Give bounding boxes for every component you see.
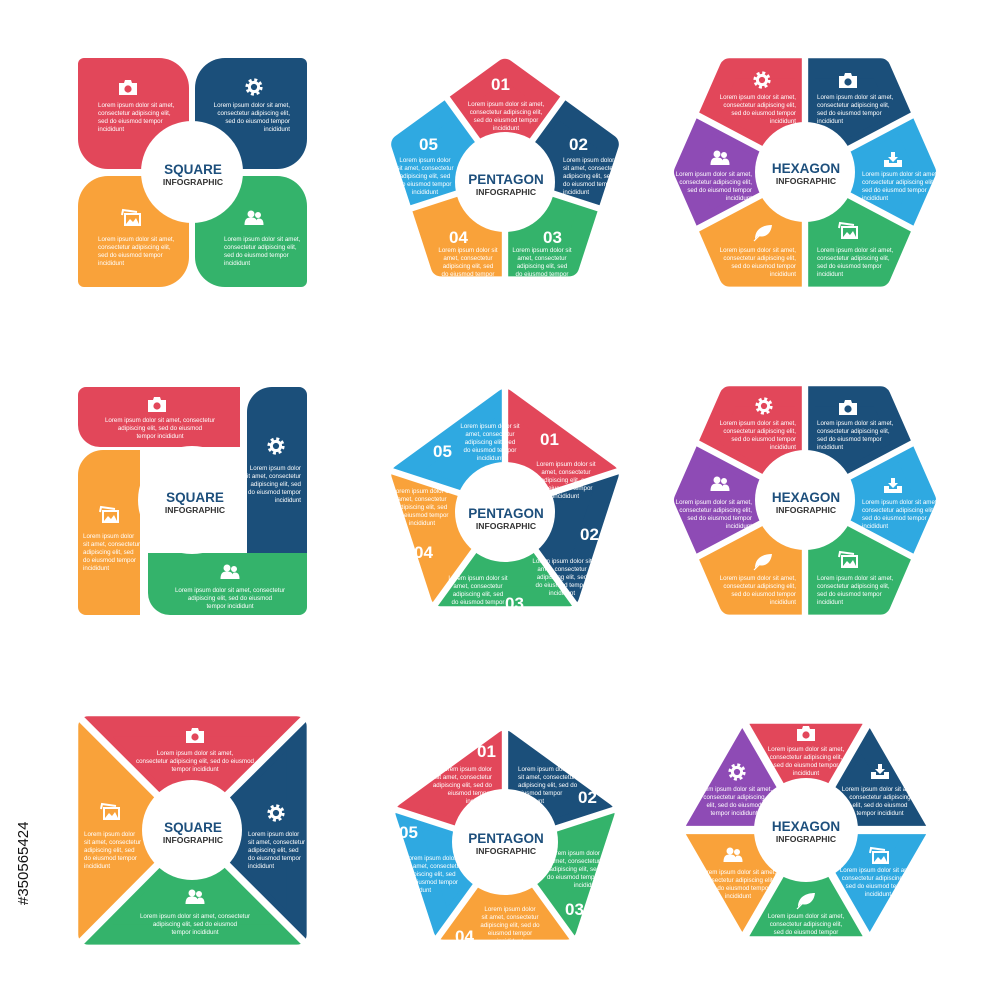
icons and text: sed do eiusmod tempor — [774, 762, 838, 769]
petal: blue gear: sed do eiusmod tempor — [225, 118, 290, 125]
labels: incididunt — [553, 493, 579, 500]
labels: Lorem ipsum dolor — [441, 766, 492, 773]
labels: incididunt — [465, 607, 491, 614]
icons and text: Lorem ipsum dolor sit amet, — [768, 746, 844, 753]
labels: adipiscing elit, sed — [549, 866, 601, 873]
labels: eiusmod tempor — [448, 790, 492, 797]
icons and text: Lorem ipsum dolor sit amet, — [700, 869, 776, 876]
icons and text: Lorem ipsum dolor sit amet, — [676, 499, 752, 506]
panel: pentagon infographic A — [396, 69, 620, 289]
labels: incididunt — [409, 520, 435, 527]
icons and text: incididunt — [862, 195, 888, 202]
watermark id: #350565424 — [15, 822, 32, 905]
icons and text: Lorem ipsum dolor — [84, 831, 135, 838]
petal: blue gear: Lorem ipsum dolor sit amet, — [214, 102, 290, 109]
icons and text: sit amet, consectetur — [248, 839, 305, 846]
panel: hexagon infographic A — [676, 52, 939, 293]
icons and text: sed do eiusmod tempor — [687, 515, 752, 522]
labels: adipiscing elit, sed — [537, 574, 588, 581]
labels: numbers and text: adipiscing elit, sed — [517, 263, 568, 270]
icons and text: incididunt — [770, 599, 796, 606]
icons and text — [676, 399, 939, 606]
petal: green people: sed do eiusmod tempor — [224, 252, 289, 259]
icons and text: consectetur adipiscing elit, — [679, 507, 752, 514]
labels: numbers and text: Lorem ipsum dolor sit — [438, 247, 498, 254]
petal: blue gear: consectetur adipiscing elit, — [217, 110, 290, 117]
icons and text: Lorem ipsum dolor sit amet, — [720, 420, 796, 427]
icons and text: incididunt — [726, 523, 752, 530]
petal: red camera: Lorem ipsum dolor sit amet, — [98, 102, 175, 109]
icons and text: incididunt — [84, 863, 110, 870]
icons and text: sed do eiusmod tempor — [731, 110, 796, 117]
labels: numbers and text: do eiusmod tempor — [563, 181, 616, 188]
icons and text: tempor incididunt — [171, 766, 219, 773]
icons and text: incididunt — [817, 271, 843, 278]
icons and text: sed do eiusmod tempor — [706, 885, 770, 892]
icons and text: consectetur adipiscing elit, — [770, 921, 843, 928]
labels: 04 — [455, 927, 474, 946]
labels: numbers and text: incididunt — [412, 189, 438, 196]
petal: green people: consectetur adipiscing elit, — [224, 244, 297, 251]
icons and text: Lorem ipsum dolor sit amet, — [842, 786, 918, 793]
icons and text: sed do eiusmod tempor — [817, 436, 882, 443]
labels: amet, consectetur — [541, 469, 591, 476]
panel: pentagon infographic C — [395, 730, 615, 940]
center label — [455, 132, 555, 232]
petal: red camera: incididunt — [98, 126, 124, 133]
labels: numbers and text: Lorem ipsum dolor — [563, 157, 614, 164]
labels: numbers and text: adipiscing elit, sed — [400, 173, 451, 180]
petal: green people: tempor incididunt — [206, 603, 254, 610]
icons and text: Lorem ipsum dolor sit amet, — [817, 247, 894, 254]
labels — [399, 742, 601, 946]
icons and text — [676, 73, 939, 278]
labels: numbers and text: sit amet, consectetur — [396, 165, 454, 172]
labels: sit amet, consectetur — [543, 858, 600, 865]
petal: red camera: adipiscing elit, sed do eiusmod — [118, 425, 203, 432]
labels: sit amet, consectetur — [435, 774, 492, 781]
petal: orange image: sit amet, consectetur — [83, 541, 140, 548]
icons and text: incididunt — [726, 195, 752, 202]
center label: SQUARE — [164, 162, 222, 177]
petal: green people: adipiscing elit, sed do eiusmod — [188, 595, 273, 602]
center label — [755, 450, 855, 550]
petal: orange image: incididunt — [83, 565, 109, 572]
icons and text: Lorem ipsum dolor sit amet, — [720, 575, 796, 582]
labels: Lorem ipsum dolor — [405, 855, 456, 862]
labels: Lorem ipsum dolor — [484, 906, 536, 913]
labels: numbers and text: amet, consectetur — [517, 255, 567, 262]
icons and text — [84, 728, 305, 936]
petal: blue gear: adipiscing elit, sed — [250, 481, 302, 488]
center label: INFOGRAPHIC — [776, 505, 836, 515]
petal: red camera: consectetur adipiscing elit, — [98, 110, 171, 117]
icons and text: incididunt — [770, 118, 796, 125]
icons and text: sed do eiusmod tempor — [731, 436, 796, 443]
icons and text — [696, 726, 918, 944]
icons and text: incididunt — [725, 893, 751, 900]
petal: red camera: Lorem ipsum dolor sit amet, consectetur — [105, 417, 215, 424]
icons and text: incididunt — [817, 118, 843, 125]
icons and text: sed do eiusmod tempor — [846, 883, 910, 890]
labels: Lorem ipsum dolor sit — [392, 488, 452, 495]
icons and text: Lorem ipsum dolor sit amet, — [720, 247, 796, 254]
panel: square infographic C (octagon) — [78, 716, 307, 945]
labels: incididunt — [574, 882, 600, 889]
center label: HEXAGON — [772, 819, 840, 834]
center label — [138, 446, 246, 554]
icons and text: sed do eiusmod tempor — [774, 929, 838, 936]
icons and text: sed do eiusmod tempor — [817, 591, 882, 598]
labels: do eiusmod tempor — [405, 879, 458, 886]
icons and text: adipiscing elit, sed — [248, 847, 299, 854]
petal: blue gear: sit amet, consectetur — [244, 473, 301, 480]
labels: incididunt — [477, 455, 503, 462]
labels: 01 — [477, 742, 496, 761]
petal: orange image: consectetur adipiscing elit, — [98, 244, 171, 251]
labels: 05 — [433, 442, 452, 461]
labels: numbers and text: incididunt — [493, 125, 519, 132]
icons and text: consectetur adipiscing elit, sed do eiusmod — [136, 758, 255, 765]
panel: pentagon infographic B — [391, 389, 619, 606]
center label: INFOGRAPHIC — [476, 521, 536, 531]
center label — [754, 778, 858, 882]
labels: incididunt — [518, 798, 544, 805]
icons and text: consectetur adipiscing elit, — [702, 877, 775, 884]
labels: incididunt — [497, 938, 523, 945]
icons and text: sed do eiusmod tempor — [731, 263, 796, 270]
labels: 03 — [505, 594, 524, 613]
labels: adipiscing elit, sed — [453, 591, 504, 598]
icons and text: Lorem ipsum dolor sit amet, — [817, 94, 894, 101]
icons and text: sit amet, consectetur — [84, 839, 141, 846]
labels: numbers and text: amet, consectetur — [443, 255, 493, 262]
labels: Lorem ipsum dolor — [518, 766, 569, 773]
labels: amet, consectetur — [537, 566, 587, 573]
labels: Lorem ipsum dolor sit — [532, 558, 592, 565]
petal: blue gear: incididunt — [264, 126, 290, 133]
panel: hexagon infographic B — [676, 380, 939, 621]
labels: numbers and text: sit amet, consectetur — [563, 165, 620, 172]
labels: 02 — [578, 788, 597, 807]
labels: do eiusmod tempor — [464, 447, 516, 454]
labels: 03 — [565, 900, 584, 919]
icons and text: sed do eiusmod tempor — [731, 591, 796, 598]
petal: red camera: tempor incididunt — [136, 433, 184, 440]
labels: amet, consectetur — [453, 583, 503, 590]
petal: orange image: incididunt — [98, 260, 124, 267]
labels: numbers and text: sed do eiusmod tempor — [474, 117, 538, 124]
labels: numbers and text: 01 — [491, 75, 510, 94]
center label: INFOGRAPHIC — [776, 176, 836, 186]
labels: adipiscing elit, sed do — [518, 782, 578, 789]
center label — [142, 780, 242, 880]
icons and text: incididunt — [248, 863, 274, 870]
labels: sit amet, consectetur — [481, 914, 539, 921]
labels: numbers and text: incididunt — [455, 279, 481, 286]
icons and text: incididunt — [793, 770, 819, 777]
petal: orange image: Lorem ipsum dolor — [83, 533, 134, 540]
labels: numbers and text: incididunt — [529, 279, 555, 286]
center label: PENTAGON — [468, 831, 544, 846]
icons and text: incididunt — [817, 599, 843, 606]
labels — [392, 423, 599, 614]
labels: numbers and text: Lorem ipsum dolor — [399, 157, 451, 164]
icons and text: Lorem ipsum dolor sit amet, consectetur — [140, 913, 250, 920]
icons and text: consectetur adipiscing elit, — [817, 102, 890, 109]
center label — [452, 789, 558, 895]
icons and text: consectetur adipiscing elit, — [723, 583, 796, 590]
labels: adipiscing elit, sed — [405, 871, 456, 878]
icons and text: incididunt — [865, 891, 891, 898]
icons and text: Lorem ipsum dolor sit amet, — [696, 786, 772, 793]
icons and text: Lorem ipsum dolor sit amet, — [720, 94, 796, 101]
labels: eiusmod tempor — [518, 790, 562, 797]
icons and text: consectetur adipiscing elit, — [862, 507, 935, 514]
labels: 01 — [540, 430, 559, 449]
petal: red camera: sed do eiusmod tempor — [98, 118, 163, 125]
labels: adipiscing elit, sed — [397, 504, 448, 511]
center label: INFOGRAPHIC — [776, 834, 836, 844]
petal: orange image: do eiusmod tempor — [83, 557, 136, 564]
icons and text: adipiscing elit, sed — [84, 847, 135, 854]
center label: PENTAGON — [468, 172, 544, 187]
labels: 02 — [580, 525, 599, 544]
labels: Lorem ipsum dolor — [549, 850, 600, 857]
center label: INFOGRAPHIC — [476, 846, 536, 856]
petal: orange image: sed do eiusmod tempor — [98, 252, 163, 259]
petal: blue gear: incididunt — [275, 497, 301, 504]
icons and text: consectetur adipiscing elit, — [723, 255, 796, 262]
labels: numbers and text: Lorem ipsum dolor sit — [512, 247, 572, 254]
labels: 04 — [414, 543, 433, 562]
labels: 05 — [399, 823, 418, 842]
labels: numbers and text: 02 — [569, 135, 588, 154]
icons and text: Lorem ipsum dolor — [248, 831, 299, 838]
labels: incididunt — [466, 798, 492, 805]
center label: INFOGRAPHIC — [476, 187, 536, 197]
icons and text: incididunt — [770, 271, 796, 278]
labels: amet, consectetur — [465, 431, 515, 438]
icons and text: elit, sed do eiusmod — [706, 802, 762, 809]
center label — [141, 121, 243, 223]
labels: adipiscing elit, sed — [541, 477, 592, 484]
labels: numbers and text: adipiscing elit, sed — [443, 263, 494, 270]
icons and text: consectetur adipiscing elit, — [723, 428, 796, 435]
labels: numbers and text: 04 — [449, 228, 468, 247]
icons and text: consectetur adipiscing elit, — [770, 754, 843, 761]
petal: red camera — [78, 387, 240, 447]
petal: red camera — [78, 58, 189, 169]
petal: blue gear — [195, 58, 307, 169]
labels: adipiscing elit, sed do — [433, 782, 493, 789]
icons and text: Lorem ipsum dolor sit amet, — [817, 420, 894, 427]
petal: orange image: adipiscing elit, sed — [83, 549, 134, 556]
labels: amet, consectetur — [397, 496, 447, 503]
icons and text: do eiusmod tempor — [248, 855, 301, 862]
labels: numbers and text: consectetur adipiscing elit, — [470, 109, 543, 116]
labels: numbers and text: adipiscing elit, sed — [563, 173, 614, 180]
panel: hexagon infographic C — [686, 724, 926, 936]
center label: HEXAGON — [772, 161, 840, 176]
icons and text: consectetur adipiscing elit, — [723, 102, 796, 109]
panel: square infographic B (pinwheel) — [78, 387, 307, 615]
center label: PENTAGON — [468, 506, 544, 521]
labels: Lorem ipsum dolor sit — [460, 423, 520, 430]
icons and text: incididunt — [793, 937, 819, 944]
icons and text: adipiscing elit, sed do eiusmod — [153, 921, 238, 928]
icons and text: Lorem ipsum dolor sit amet, — [768, 913, 844, 920]
icons and text: sed do eiusmod tempor — [817, 263, 882, 270]
icons and text: consectetur adipiscing elit, — [679, 179, 752, 186]
icons and text: consectetur adipiscing elit, — [842, 875, 915, 882]
center label — [755, 122, 855, 222]
labels: eiusmod tempor — [488, 930, 532, 937]
icons and text: elit, sed do eiusmod — [852, 802, 908, 809]
icons and text: incididunt — [817, 444, 843, 451]
labels: do eiusmod tempor — [540, 485, 592, 492]
icons and text: Lorem ipsum dolor sit amet, — [862, 499, 939, 506]
icons and text: incididunt — [770, 444, 796, 451]
center label: SQUARE — [164, 820, 222, 835]
icons and text: tempor incididunt — [171, 929, 219, 936]
icons and text: consectetur adipiscing — [849, 794, 911, 801]
icons and text: sed do eiusmod tempor — [862, 515, 927, 522]
icons and text: consectetur adipiscing elit, — [817, 255, 890, 262]
labels: numbers and text: do eiusmod tempor — [399, 181, 451, 188]
labels: Lorem ipsum dolor sit — [448, 575, 508, 582]
labels: sit amet, consectetur — [405, 863, 462, 870]
petal: green people: incididunt — [224, 260, 250, 267]
labels: adipiscing elit, sed do — [480, 922, 540, 929]
labels: numbers and text: incididunt — [563, 189, 589, 196]
icons and text: consectetur adipiscing elit, — [817, 583, 890, 590]
center label — [455, 462, 555, 562]
petal: orange image: Lorem ipsum dolor sit amet, — [98, 236, 175, 243]
labels: incididunt — [405, 887, 431, 894]
center label: HEXAGON — [772, 490, 840, 505]
labels: do eiusmod tempor — [452, 599, 504, 606]
labels: numbers and text: Lorem ipsum dolor sit amet, — [468, 101, 544, 108]
icons and text: Lorem ipsum dolor sit amet, — [862, 171, 939, 178]
labels: numbers and text: 03 — [543, 228, 562, 247]
labels: incididunt — [549, 590, 575, 597]
icons and text: sed do eiusmod tempor — [862, 187, 927, 194]
icons and text: Lorem ipsum dolor sit amet, — [676, 171, 752, 178]
icons and text: do eiusmod tempor — [84, 855, 137, 862]
labels: do eiusmod tempor — [536, 582, 588, 589]
petal: orange image — [78, 176, 189, 287]
icons and text: Lorem ipsum dolor sit amet, — [157, 750, 233, 757]
petal: blue gear: Lorem ipsum dolor — [250, 465, 301, 472]
labels: sit amet, consectetur — [518, 774, 575, 781]
icons and text: sed do eiusmod tempor — [817, 110, 882, 117]
panel: square infographic A — [78, 58, 307, 287]
labels: adipiscing elit, sed — [465, 439, 516, 446]
icons and text: sed do eiusmod tempor — [687, 187, 752, 194]
icons and text: Lorem ipsum dolor sit amet, — [817, 575, 894, 582]
petal: green people: Lorem ipsum dolor sit amet, — [224, 236, 301, 243]
petal: orange image — [78, 450, 140, 615]
labels: do eiusmod tempor — [547, 874, 600, 881]
labels: numbers and text: do eiusmod tempor — [516, 271, 568, 278]
petal: green people: Lorem ipsum dolor sit amet, consectetur — [175, 587, 285, 594]
icons and text: consectetur adipiscing — [703, 794, 765, 801]
petal: blue gear — [244, 387, 307, 555]
labels: numbers and text: do eiusmod tempor — [442, 271, 494, 278]
center label: INFOGRAPHIC — [163, 177, 223, 187]
icons and text: consectetur adipiscing elit, — [817, 428, 890, 435]
icons and text: incididunt — [862, 523, 888, 530]
labels: numbers and text — [396, 75, 620, 286]
icons and text: Lorem ipsum dolor sit amet, — [840, 867, 916, 874]
labels: do eiusmod tempor — [396, 512, 448, 519]
petal: green people — [148, 553, 307, 615]
center label: INFOGRAPHIC — [165, 505, 225, 515]
center label: INFOGRAPHIC — [163, 835, 223, 845]
petal: blue gear: do eiusmod tempor — [248, 489, 301, 496]
petal: green people — [195, 176, 307, 287]
labels: numbers and text: 05 — [419, 135, 438, 154]
labels: Lorem ipsum dolor sit — [536, 461, 596, 468]
icons and text: tempor incididunt — [856, 810, 904, 817]
center label: SQUARE — [166, 490, 224, 505]
icons and text: consectetur adipiscing elit, — [862, 179, 935, 186]
icons and text: tempor incididunt — [710, 810, 758, 817]
